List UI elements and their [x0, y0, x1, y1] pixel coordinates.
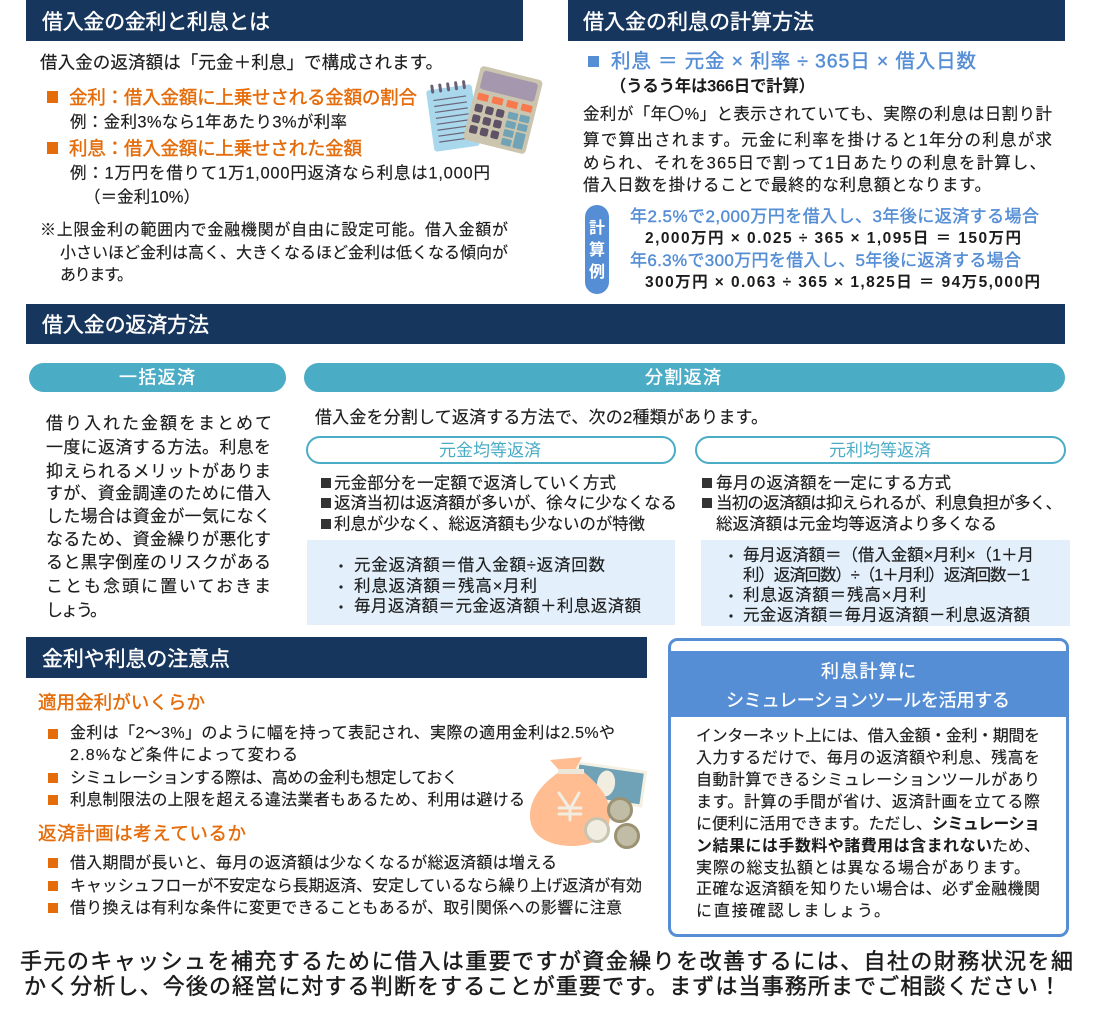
definition: 金利: 金利：借入金額に上乗せされる金額の割合 — [69, 87, 417, 108]
list: 元金均等返済の特徴 — [321, 474, 677, 534]
list: 元利均等返済の特徴: 毎月の返済額を一定にする方式 — [716, 474, 951, 492]
heading: 計算方法 — [568, 0, 1065, 41]
text: 一括返済の説明: なるため、資金繰りが悪化す — [46, 530, 271, 549]
text: 一括返済の説明: ことも念頭に置いておきま — [46, 577, 271, 596]
heading: 注意点 — [26, 637, 647, 678]
explanation text: 算で算出されます。元金に利率を掛けると1年分の利息が求 — [583, 130, 1052, 150]
body text: に直接確認しましょう。 — [696, 902, 890, 920]
body text: ン結果には手数料や諸費用は含まれない — [696, 836, 992, 855]
heading: 注意点: 金利や利息の注意点 — [42, 648, 230, 671]
note: 小さいほど金利は高く、大きくなるほど金利は低くなる傾向が — [60, 244, 508, 262]
body text: ます。計算の手間が省け、返済計画を立てる際 — [696, 792, 1040, 811]
method: 元利均等返済 — [696, 437, 1070, 626]
panel: 返済方法 — [26, 304, 1070, 626]
note — [40, 221, 508, 284]
heading: 返済方法: 借入金の返済方法 — [42, 314, 209, 337]
text: 分割返済の説明: 借入金を分割して返済する方法で、次の2種類があります。 — [315, 408, 768, 427]
calculation examples — [630, 207, 1040, 291]
panel: 借入金の金利と利息とは — [26, 0, 543, 284]
column: 分割返済 — [304, 363, 1070, 626]
text: 一括返済の説明: 抑えられるメリットがありま — [46, 462, 271, 481]
text: 一括返済の説明: 借り入れた金額をまとめて — [46, 414, 272, 433]
intro text: 借入金の返済額は「元金＋利息」で構成されます。 — [40, 52, 443, 72]
heading: 金利と利息: 借入金の金利と利息とは — [42, 11, 270, 34]
badge: 計算例: 算 — [589, 240, 605, 259]
list: 適用金利: 利息制限法の上限を超える違法業者もあるため、利用は避ける — [70, 791, 525, 809]
body text: シミュレーショ — [932, 816, 1040, 833]
column: 一括返済 — [29, 363, 286, 620]
list: 元金均等返済の特徴: 利息が少なく、総返済額も少ないのが特徴 — [334, 514, 646, 534]
list: 元金均等返済の特徴: 返済当初は返済額が多いが、徐々に少なくなる — [334, 494, 677, 512]
body text: 正確な返済額を知りたい場合は、必ず金融機関 — [696, 880, 1040, 898]
formula box: 元利均等返済: 元金返済額＝毎月返済額－利息返済額 — [743, 606, 1030, 624]
formula: （うるう年は366日で計算） — [610, 76, 815, 96]
panel: シミュレーションツール — [670, 640, 1068, 936]
heading: シミュレーションツール: 利息計算に — [821, 662, 916, 682]
heading: 金利と利息 — [26, 0, 523, 41]
closing message — [20, 949, 1073, 999]
closing message: 手元のキャッシュを補充するために借入は重要ですが資金繰りを改善するには、自社の財務状況を細 — [20, 949, 1073, 974]
list: 適用金利: 2.8%など条件によって変わる — [70, 746, 298, 764]
text: 一括返済の説明 — [46, 414, 272, 620]
note: ※上限金利の範囲内で金融機関が自由に設定可能。借入金額が — [40, 221, 508, 239]
heading: 返済方法 — [26, 304, 1065, 344]
formula — [588, 50, 976, 96]
pill: 元金均等返済: 元金均等返済 — [439, 441, 541, 460]
body text: 自動計算できるシミュレーションツールがあり — [696, 770, 1040, 789]
calculation examples: 300万円 × 0.063 ÷ 365 × 1,825日 ＝ 94万5,000円 — [645, 274, 1040, 291]
text: 一括返済の説明: すが、資金調達のために借入 — [46, 484, 271, 503]
explanation text: められ、それを365日で割って1日あたりの利息を計算し、 — [583, 154, 1046, 172]
panel: 利息の計算方法 — [568, 0, 1065, 294]
explanation text: 金利が「年〇%」と表示されていても、実際の利息は日割り計 — [583, 104, 1052, 124]
formula box: 元金均等返済: 利息返済額＝残高×月利 — [354, 576, 537, 596]
list: 返済計画: キャッシュフローが不安定なら長期返済、安定しているなら繰り上げ返済が有効 — [70, 877, 642, 895]
formula box: 元利均等返済: 利）返済回数）÷（1＋月利）返済回数－1 — [743, 566, 1030, 584]
list: 元利均等返済の特徴: 総返済額は元金均等返済より多くなる — [716, 514, 997, 534]
list: 返済計画 — [48, 854, 642, 917]
pill: 元金均等返済 — [307, 437, 675, 463]
formula box: 元利均等返済: 毎月返済額＝（借入金額×月利×（1＋月 — [743, 546, 1034, 564]
text: 一括返済の説明: した場合は資金が一気になく — [46, 507, 271, 526]
calculation examples: 年6.3%で300万円を借入し、5年後に返済する場合 — [630, 251, 1021, 270]
definition: 利息: （＝金利10%） — [84, 188, 200, 206]
subheading: 適用金利: 適用金利がいくらか — [38, 692, 205, 713]
pill: 一括返済: 一括返済 — [119, 368, 195, 388]
formula box: 元金均等返済 — [307, 540, 675, 625]
explanation text: 借入日数を掛けることで最終的な利息額となります。 — [583, 176, 991, 194]
definition: 金利: 例：金利3%なら1年あたり3%が利率 — [70, 112, 347, 132]
formula box: 元利均等返済 — [701, 540, 1070, 626]
method: 元金均等返済 — [307, 437, 677, 625]
body text: に便利に活用できます。ただし、 — [696, 815, 932, 833]
formula box: 元金均等返済: 毎月返済額＝元金返済額＋利息返済額 — [354, 596, 642, 616]
list: 適用金利: 金利は「2～3%」のように幅を持って表記され、実際の適用金利は2.5%や — [70, 724, 615, 742]
icon: notepad and calculator — [425, 65, 543, 155]
pill: 分割返済: 分割返済 — [645, 368, 721, 388]
body text: ため、 — [992, 837, 1040, 855]
pill: 分割返済 — [304, 363, 1065, 392]
heading: 計算方法: 借入金の利息の計算方法 — [583, 11, 814, 34]
list: 返済計画: 借入期間が長いと、毎月の返済額は少なくなるが総返済額は増える — [70, 854, 557, 872]
calculation examples: 年2.5%で2,000万円を借入し、3年後に返済する場合 — [630, 207, 1039, 226]
heading: シミュレーションツール: シミュレーションツールを活用する — [726, 690, 1010, 710]
pill: 元利均等返済: 元利均等返済 — [829, 441, 931, 460]
box outline — [670, 640, 1068, 936]
list: 元利均等返済の特徴 — [702, 474, 1062, 534]
calculation examples: 2,000万円 × 0.025 ÷ 365 × 1,095日 ＝ 150万円 — [645, 230, 1021, 247]
text: 一括返済の説明: ると黒字倒産のリスクがある — [46, 553, 271, 572]
formula box: 元利均等返済: 利息返済額＝残高×月利 — [743, 586, 926, 604]
list: 適用金利 — [48, 724, 615, 809]
definition: 利息 — [47, 138, 490, 206]
formula: 利息 ＝ 元金 × 利率 ÷ 365日 × 借入日数 — [611, 50, 976, 72]
heading: シミュレーションツール — [671, 651, 1066, 717]
list: 元利均等返済の特徴: 当初の返済額は抑えられるが、利息負担が多く、 — [716, 494, 1062, 512]
body text: 実際の総支払額とは異なる場合があります。 — [696, 859, 1030, 877]
list: 返済計画: 借り換えは有利な条件に変更できることもあるが、取引関係への影響に注意 — [70, 899, 622, 917]
pill: 一括返済 — [29, 363, 286, 392]
explanation text — [583, 104, 1052, 194]
formula box: 元金均等返済: 元金返済額＝借入金額÷返済回数 — [354, 556, 605, 574]
text: 一括返済の説明: 一度に返済する方法。利息を — [46, 438, 271, 457]
closing message: かく分析し、今後の経営に対する判断をすることが重要です。まずは当事務所までご相談ください！ — [24, 974, 1061, 999]
badge: 計算例 — [585, 205, 609, 294]
text: 一括返済の説明: しょう。 — [46, 601, 107, 620]
badge: 計算例: 計 — [589, 219, 605, 237]
body text — [696, 727, 1040, 920]
list: 適用金利: シミュレーションする際は、高めの金利も想定しておく — [70, 769, 458, 787]
body text: 入力するだけで、毎月の返済額や利息、残高を — [696, 749, 1040, 767]
badge: 計算例: 例 — [589, 263, 605, 281]
definition: 利息: 利息：借入金額に上乗せされた金額 — [69, 138, 362, 159]
pill: 元利均等返済 — [696, 437, 1065, 463]
list: 元金均等返済の特徴: 元金部分を一定額で返済していく方式 — [334, 474, 616, 492]
definition: 金利 — [47, 87, 417, 132]
definition: 利息: 例：1万円を借りて1万1,000円返済なら利息は1,000円 — [70, 164, 490, 182]
panel: 注意点 — [26, 637, 647, 917]
body text: インターネット上には、借入金額・金利・期間を — [696, 727, 1040, 745]
note: あります。 — [60, 266, 133, 284]
subheading: 返済計画: 返済計画は考えているか — [38, 823, 246, 844]
icon: money bag with bill and coins — [530, 757, 647, 848]
